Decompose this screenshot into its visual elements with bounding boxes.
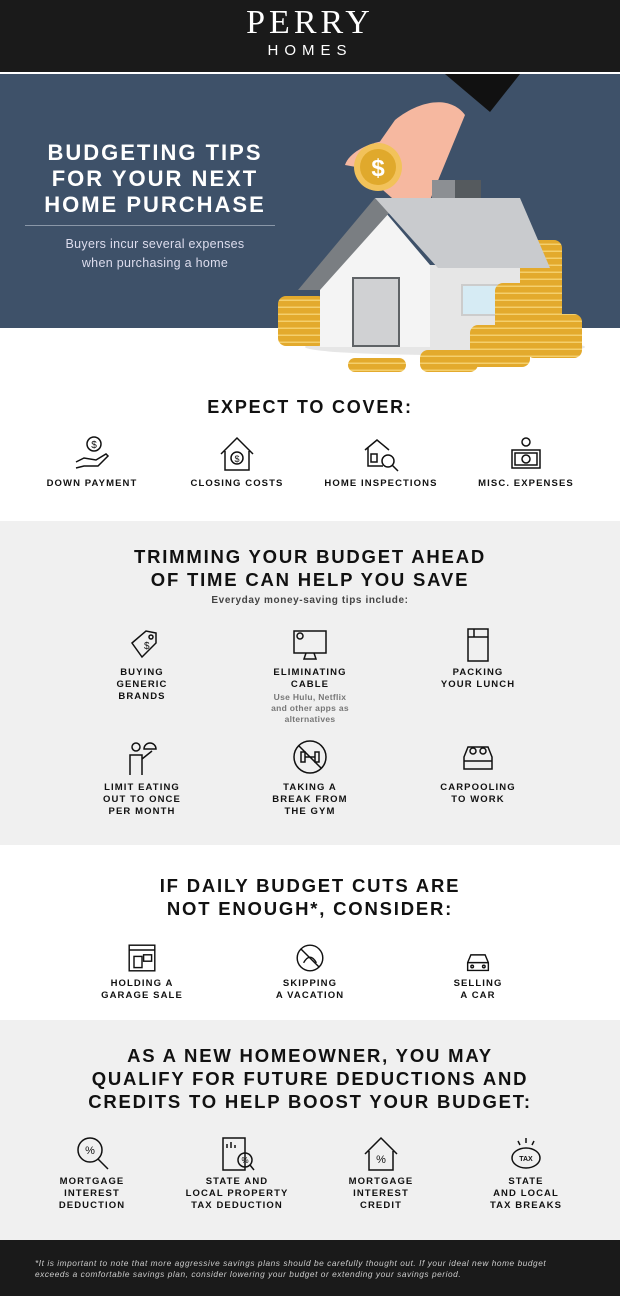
footer disclaimer [0,1240,620,1296]
item: carpooling [440,746,516,805]
item: mortgage interest credit: MORTGAGE [349,1176,413,1187]
item: gym break [272,740,348,817]
item: mortgage interest credit: % [376,1154,386,1166]
item: generic brands [116,630,167,702]
section: expect to cover [47,397,574,489]
item: property tax deduction: % [241,1156,249,1165]
item: eliminating cable [271,630,349,724]
section: if daily cuts not enough [101,875,502,1001]
hero subtitle [66,237,244,270]
item: mortgage interest credit [349,1137,413,1211]
item: property tax deduction: LOCAL PROPERTY [186,1188,288,1199]
item: tax breaks: AND LOCAL [493,1188,559,1199]
item: mortgage interest deduction: MORTGAGE [60,1176,124,1187]
item: home inspections [324,439,438,489]
item: gym break: TAKING A [283,782,337,793]
item: skip vacation: SKIPPING [283,978,337,989]
item: mortgage interest deduction: % [85,1145,95,1157]
subheading: Everyday money-saving tips include: [211,595,409,606]
hero title [44,140,266,217]
section: deductions [0,1020,620,1240]
item: down payment [47,436,137,489]
item: sell car: SELLING [454,978,502,989]
item: eating out: OUT TO ONCE [103,794,181,805]
heading: deductions [88,1045,532,1112]
item: garage sale [101,944,183,1001]
item: eliminating cable: CABLE [291,679,329,690]
item: carpooling: TO WORK [451,794,505,805]
item: eating out: PER MONTH [109,806,175,817]
item: tax breaks: TAX BREAKS [490,1200,562,1211]
hero title: BUDGETING TIPS [47,140,262,165]
item: property tax deduction [186,1137,288,1211]
item: home inspections: HOME INSPECTIONS [324,478,438,489]
item: garage sale: HOLDING A [111,978,173,989]
item: gym break: THE GYM [284,806,335,817]
item: eating out [103,742,181,817]
item: closing costs: CLOSING COSTS [191,478,283,489]
header bar [0,0,620,72]
hero illustration: house with coins [278,74,585,372]
heading: consider: IF DAILY BUDGET CUTS ARE [160,875,460,896]
item: eating out: LIMIT EATING [104,782,180,793]
hero panel [0,74,620,328]
item: skip vacation [276,944,344,1001]
hero subtitle: when purchasing a home [82,256,228,270]
heading: expect to cover: EXPECT TO COVER: [207,397,413,417]
item: tax breaks [490,1138,562,1211]
heading: trimming: TRIMMING YOUR BUDGET AHEAD [134,546,486,567]
heading: deductions: QUALIFY FOR FUTURE DEDUCTIONS AND [92,1068,528,1089]
item: tax breaks: STATE [508,1176,544,1187]
item: mortgage interest deduction: DEDUCTION [59,1200,125,1211]
item: eliminating cable: ELIMINATING [273,667,347,678]
hero illustration: house with coins: $ [371,155,385,182]
item: eliminating cable: and other apps as [271,703,349,713]
item: mortgage interest credit: INTEREST [353,1188,409,1199]
item: sell car: A CAR [460,990,496,1001]
item: carpooling: CARPOOLING [440,782,516,793]
item: property tax deduction: STATE AND [206,1176,268,1187]
item: down payment: $ [91,440,97,451]
item: eliminating cable: alternatives [285,714,335,724]
item: gym break: BREAK FROM [272,794,348,805]
item: eliminating cable: Use Hulu, Netflix [274,692,346,702]
logo: HOMES [267,42,352,59]
heading: deductions: CREDITS TO HELP BOOST YOUR BUDGET: [88,1091,532,1112]
item: misc expenses: MISC. EXPENSES [478,478,574,489]
item: packing lunch: YOUR LUNCH [441,679,515,690]
item: mortgage interest credit: CREDIT [360,1200,402,1211]
item: tax breaks: TAX [519,1156,533,1163]
item: generic brands: BUYING [120,667,164,678]
heading: consider: NOT ENOUGH*, CONSIDER: [167,898,453,919]
item: sell car [454,954,502,1001]
item: mortgage interest deduction [59,1137,125,1211]
item: packing lunch [441,628,515,690]
logo [246,4,374,59]
item: closing costs: $ [234,454,240,464]
item: generic brands: $ [144,641,150,652]
heading: trimming [134,546,486,590]
item: property tax deduction: TAX DEDUCTION [191,1200,283,1211]
item: generic brands: BRANDS [118,691,166,702]
hero title: FOR YOUR NEXT [52,166,258,191]
heading: deductions: AS A NEW HOMEOWNER, YOU MAY [127,1045,493,1066]
item: generic brands: GENERIC [116,679,167,690]
item: packing lunch: PACKING [453,667,503,678]
logo: PERRY [246,4,374,41]
item: misc expenses [478,437,574,489]
section: trimming budget [0,521,620,845]
item: down payment: DOWN PAYMENT [47,478,137,489]
item: garage sale: GARAGE SALE [101,990,183,1001]
item: closing costs [190,437,283,489]
hero title: HOME PURCHASE [44,192,266,217]
heading: consider [160,875,460,919]
heading: trimming: OF TIME CAN HELP YOU SAVE [151,569,469,590]
hero subtitle: Buyers incur several expenses [66,237,244,251]
footer disclaimer: *It is important to note that more aggressive savings plans should be carefully thought out. If your ideal new home budget exceeds a comfortable savings plan, consider lowering your budget or extending your savings period. [35,1258,546,1279]
item: skip vacation: A VACATION [276,990,344,1001]
item: mortgage interest deduction: INTEREST [64,1188,120,1199]
